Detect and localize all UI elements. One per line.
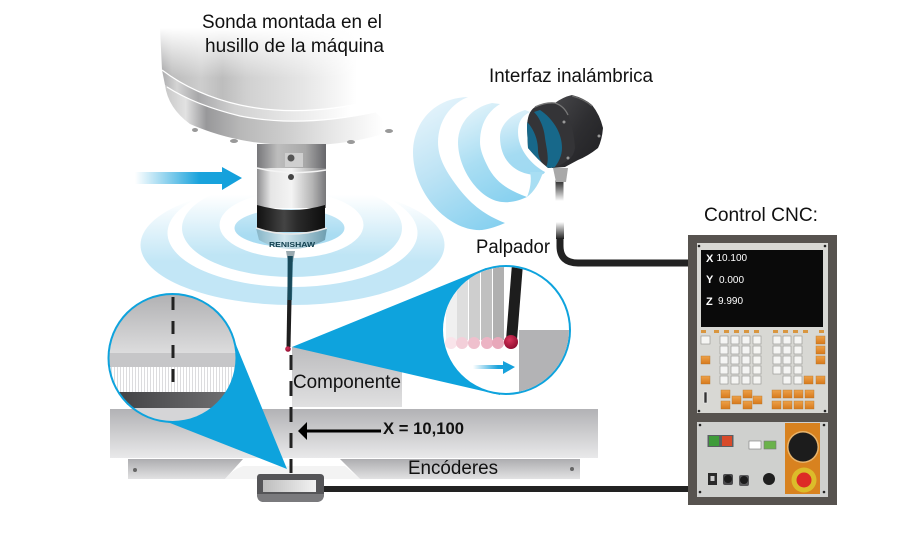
cable: interface to CNC: [556, 180, 690, 263]
machine base: [128, 459, 580, 479]
label: wireless interface: Interfaz inalámbrica: [489, 66, 653, 87]
encoder readhead: [257, 474, 324, 502]
blue arrow pointing to probe: [135, 167, 242, 190]
machine spindle: [155, 27, 405, 145]
label: machine spindle: husillo de la máquina: [205, 36, 384, 57]
label: component: Componente: [293, 372, 401, 393]
component block: [292, 347, 402, 407]
dashed measurement line: [290, 355, 292, 473]
magnifier: stylus contact: [292, 260, 575, 400]
label: spindle probe: Sonda montada en el: [202, 12, 382, 33]
CNC upper panel: Y: [706, 274, 714, 286]
CNC upper panel: Z: [706, 296, 713, 308]
wireless interface: [524, 95, 603, 182]
magnifier: encoder scale: [105, 290, 287, 469]
wireless probe: [256, 144, 327, 262]
label: X value: X = 10,100: [383, 420, 464, 438]
label: stylus: Palpador: [476, 237, 551, 258]
wireless probe: RENISHAW: [269, 240, 316, 249]
CNC controller: [688, 235, 837, 505]
CNC upper panel: 10.100: [716, 253, 748, 264]
cable: encoder to CNC: [324, 486, 690, 492]
wireless waves from interface: [413, 97, 545, 230]
CNC lower panel: [697, 422, 828, 497]
CNC upper panel: 0.000: [719, 275, 744, 286]
CNC upper panel: [697, 243, 828, 413]
signal waves around probe: [140, 179, 444, 305]
stylus: [285, 256, 293, 352]
machine table: [110, 409, 598, 458]
arrow: X measurement: [298, 422, 381, 440]
CNC upper panel: X: [706, 253, 714, 265]
label: encoders: Encóderes: [408, 458, 498, 479]
CNC upper panel: 9.990: [718, 296, 743, 307]
label: CNC control: Control CNC:: [704, 205, 818, 226]
